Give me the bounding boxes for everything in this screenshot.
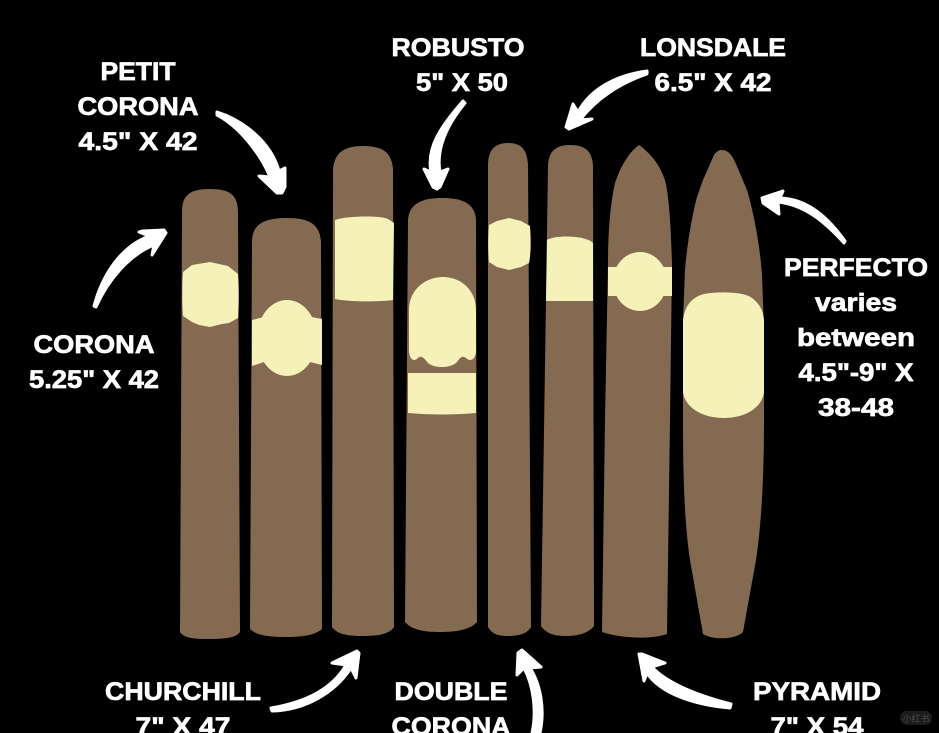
label: lonsdale: LONSDALE: [640, 34, 786, 62]
label: robusto: ROBUSTO: [392, 34, 524, 62]
label: double corona: [392, 678, 510, 733]
cigar: perfecto: [683, 150, 764, 638]
label: robusto: [392, 34, 524, 97]
arrow: pyramid: [639, 654, 731, 708]
watermark: [900, 711, 932, 725]
arrow: petit corona: [217, 112, 285, 193]
cigar: corona: [180, 189, 240, 639]
label: perfecto: 4.5"-9" X: [798, 359, 914, 387]
label: lonsdale: [640, 34, 786, 97]
arrow: lonsdale: [566, 71, 647, 129]
label: petit corona: 4.5" X 42: [78, 128, 198, 156]
label: corona: 5.25" X 42: [29, 366, 159, 394]
cigar: double corona: [488, 143, 531, 636]
arrow: double corona: [517, 650, 542, 733]
label: perfecto: varies: [815, 289, 897, 317]
label: pyramid: PYRAMID: [753, 678, 881, 706]
arrow: perfecto: [762, 191, 845, 243]
label: perfecto: between: [797, 324, 915, 352]
label: pyramid: [753, 678, 881, 733]
label: double corona: DOUBLE: [394, 678, 508, 706]
label: robusto: 5" X 50: [416, 69, 508, 97]
label: petit corona: PETIT: [100, 58, 176, 86]
cigar: petit corona: [250, 218, 322, 637]
label: churchill: CHURCHILL: [105, 678, 261, 706]
cigar: robusto: [405, 198, 477, 632]
label: perfecto: PERFECTO: [784, 254, 928, 282]
label: perfecto: [784, 254, 928, 422]
label: petit corona: [78, 58, 198, 156]
label: corona: CORONA: [34, 331, 154, 359]
label: perfecto: 38-48: [818, 394, 894, 422]
cigar: churchill: [332, 146, 394, 636]
label: petit corona: CORONA: [78, 93, 198, 121]
arrow: robusto: [424, 101, 465, 189]
arrow: churchill: [271, 651, 359, 711]
cigar: lonsdale: [541, 145, 594, 636]
label: lonsdale: 6.5" X 42: [654, 69, 772, 97]
watermark: 小红书: [902, 713, 930, 724]
cigar: pyramid: [602, 145, 672, 638]
label: churchill: [105, 678, 261, 733]
label: corona: [29, 331, 159, 394]
arrow: corona: [94, 230, 166, 307]
